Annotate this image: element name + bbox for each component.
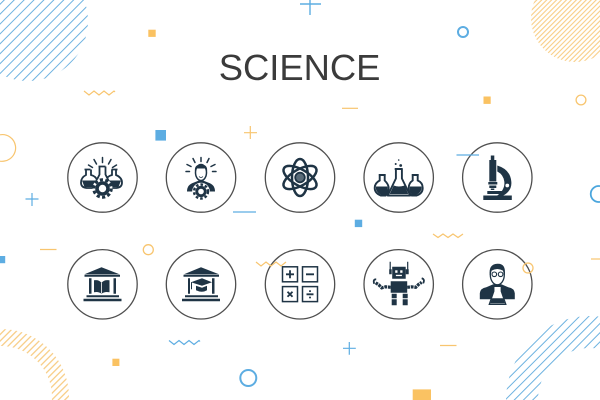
icon: robot — [364, 250, 433, 319]
icon: scientist with flask — [463, 250, 532, 319]
background hatched circle: top right — [531, 0, 600, 62]
icon: calculator keys — [265, 250, 335, 319]
title: SCIENCE — [219, 47, 380, 88]
icon: microscope — [463, 143, 532, 212]
icon: flasks and gear — [68, 143, 137, 212]
background hatched circle: top left — [0, 0, 88, 81]
icon: man with gear and idea rays — [166, 143, 236, 212]
icon: university with graduation cap — [166, 250, 236, 319]
icon: library with book — [68, 250, 137, 319]
icon: three flasks — [364, 143, 433, 212]
background hatched ring: bottom left — [0, 329, 69, 400]
background hatched ring: bottom right — [506, 316, 600, 400]
icon: atom — [265, 143, 335, 212]
